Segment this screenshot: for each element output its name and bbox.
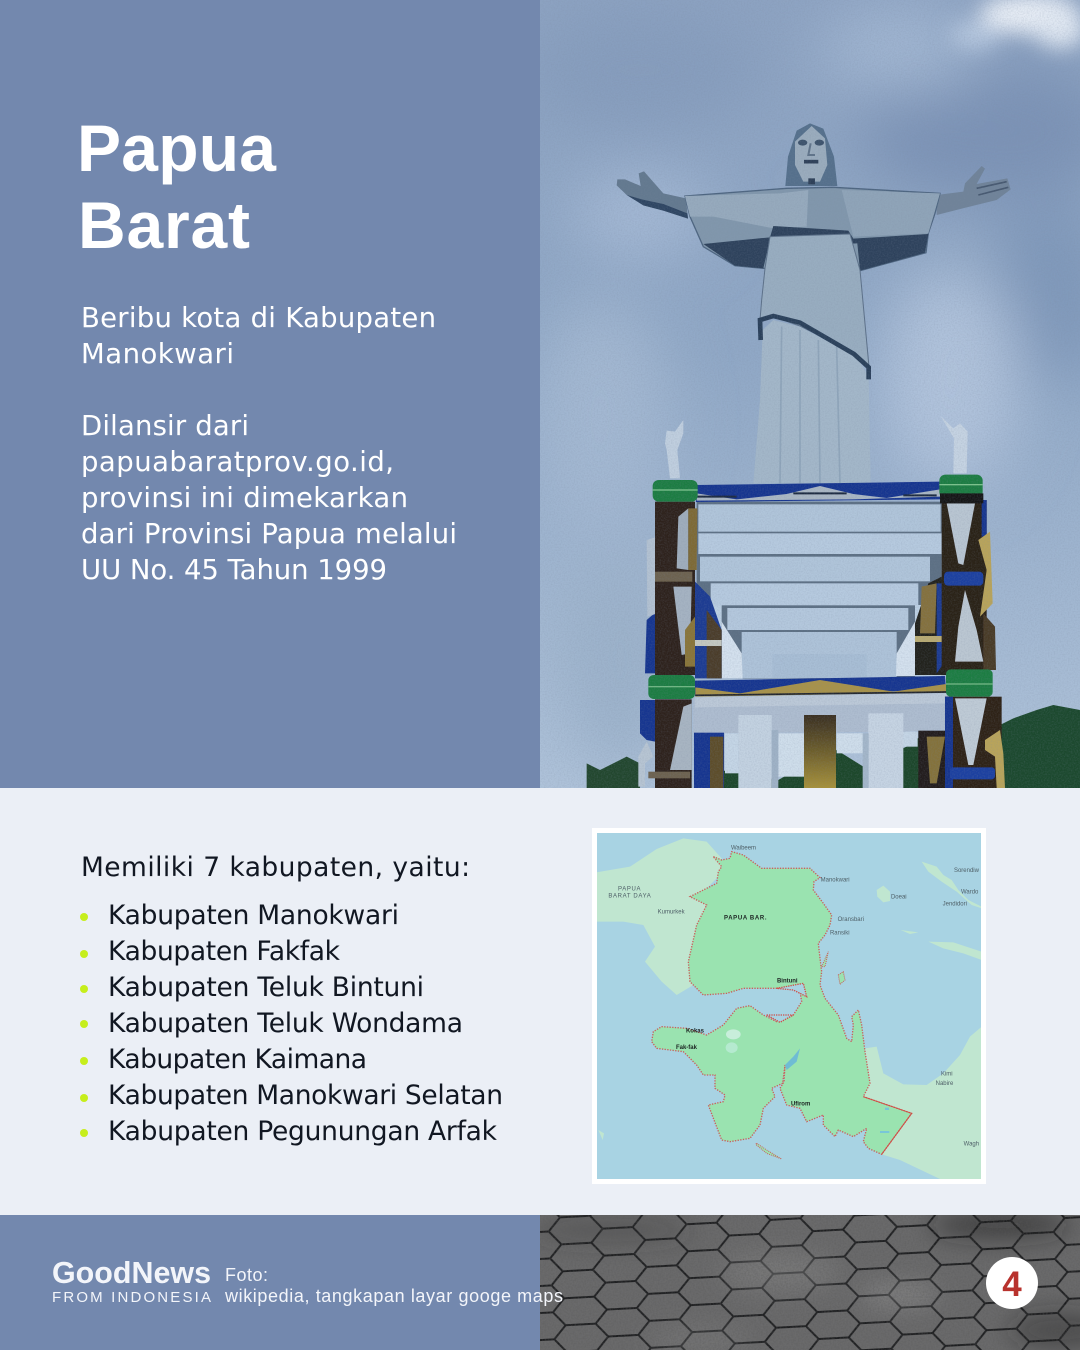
map labels: Kumurkek	[658, 910, 685, 916]
photo grain	[540, 0, 1080, 788]
list items: Kabupaten Kaimana	[108, 1044, 367, 1075]
neighbouring land	[597, 838, 982, 1179]
lower robe	[753, 320, 871, 483]
panel: title and intro	[0, 0, 540, 788]
trees	[587, 757, 640, 788]
list heading: Memiliki 7 kabupaten, yaitu:	[81, 852, 470, 883]
columns	[738, 715, 772, 788]
map labels: Ufirom	[791, 1102, 810, 1108]
text block: capital and history: Dilansir dari	[81, 410, 249, 442]
text block: capital and history: provinsi ini dimekarkan	[81, 482, 408, 514]
map labels: Doeai	[891, 894, 907, 900]
map labels: Manokwari	[821, 877, 850, 883]
province outline	[652, 852, 912, 1159]
map labels: Kokas	[686, 1028, 705, 1034]
map labels: Waibeem	[731, 845, 756, 851]
heading: Papua Barat: Barat	[78, 188, 250, 262]
text block: capital and history: dari Provinsi Papua melalui	[81, 518, 457, 550]
page number badge	[986, 1257, 1038, 1309]
map labels: PAPUA	[618, 886, 641, 892]
sky	[520, 0, 1080, 788]
map labels: Nabire	[936, 1081, 954, 1087]
page number badge: 4	[1002, 1265, 1022, 1304]
logo: GoodNews from Indonesia	[52, 1255, 211, 1306]
heading: Papua Barat	[77, 111, 277, 262]
right pillar	[942, 500, 987, 670]
lower band	[695, 676, 946, 696]
list items: Kabupaten Manokwari Selatan	[108, 1080, 503, 1111]
map: Papua Barat province	[592, 828, 986, 1184]
photo: Christ statue in Manokwari	[540, 0, 1080, 788]
lower platform	[693, 693, 947, 733]
lower openings	[725, 733, 738, 773]
pedestal	[587, 475, 1080, 788]
list items: Kabupaten Fakfak	[108, 936, 341, 967]
map labels: Kimi	[941, 1072, 953, 1078]
panel: regencies list	[80, 852, 503, 1147]
heading: Papua Barat: Papua	[77, 111, 277, 185]
right arm	[937, 166, 1011, 215]
map labels: Wardo	[961, 889, 979, 895]
top band	[696, 482, 940, 502]
map labels: Wagh	[964, 1142, 979, 1148]
list items: Kabupaten Teluk Wondama	[108, 1008, 463, 1039]
map labels	[608, 845, 980, 1148]
text block: capital and history: Beribu kota di Kabupaten	[81, 302, 436, 334]
map labels: Sorendiw	[954, 868, 980, 874]
map labels: Bintuni	[777, 979, 798, 985]
text block: capital and history: Manokwari	[81, 338, 234, 370]
map labels: Jendidori	[943, 901, 967, 907]
map labels: PAPUA BAR.	[724, 916, 767, 922]
angels	[665, 420, 683, 478]
map labels: Ransiki	[830, 930, 850, 936]
photo credit: wikipedia, tangkapan layar googe maps	[224, 1286, 563, 1306]
logo: GoodNews from Indonesia: GoodNews	[52, 1255, 211, 1290]
logo: GoodNews from Indonesia: FROM INDONESIA	[52, 1289, 211, 1306]
map labels: Oransbari	[838, 917, 864, 923]
photo credit	[224, 1265, 563, 1306]
text block: capital and history: UU No. 45 Tahun 1999	[81, 554, 387, 586]
lower pillars	[655, 699, 692, 788]
slabs	[697, 502, 942, 678]
mantle	[685, 187, 940, 271]
upper robe	[760, 234, 869, 367]
back pillars	[695, 582, 722, 678]
text block: capital and history	[81, 302, 457, 586]
left pillar	[645, 503, 658, 673]
photo credit: Foto:	[225, 1265, 268, 1285]
map labels: Fak-fak	[676, 1045, 698, 1051]
photo: hexagonal paving	[540, 1215, 1080, 1350]
statue figure	[617, 123, 1011, 483]
list items: Kabupaten Teluk Bintuni	[108, 972, 424, 1003]
map labels: BARAT DAYA	[608, 894, 651, 900]
list items: Kabupaten Pegunungan Arfak	[108, 1116, 498, 1147]
text block: capital and history: papuabaratprov.go.id,	[81, 446, 394, 478]
head	[785, 123, 837, 186]
list items	[80, 900, 503, 1147]
left arm	[617, 171, 688, 219]
list items: Kabupaten Manokwari	[108, 900, 399, 931]
footer: left band	[0, 1215, 540, 1350]
